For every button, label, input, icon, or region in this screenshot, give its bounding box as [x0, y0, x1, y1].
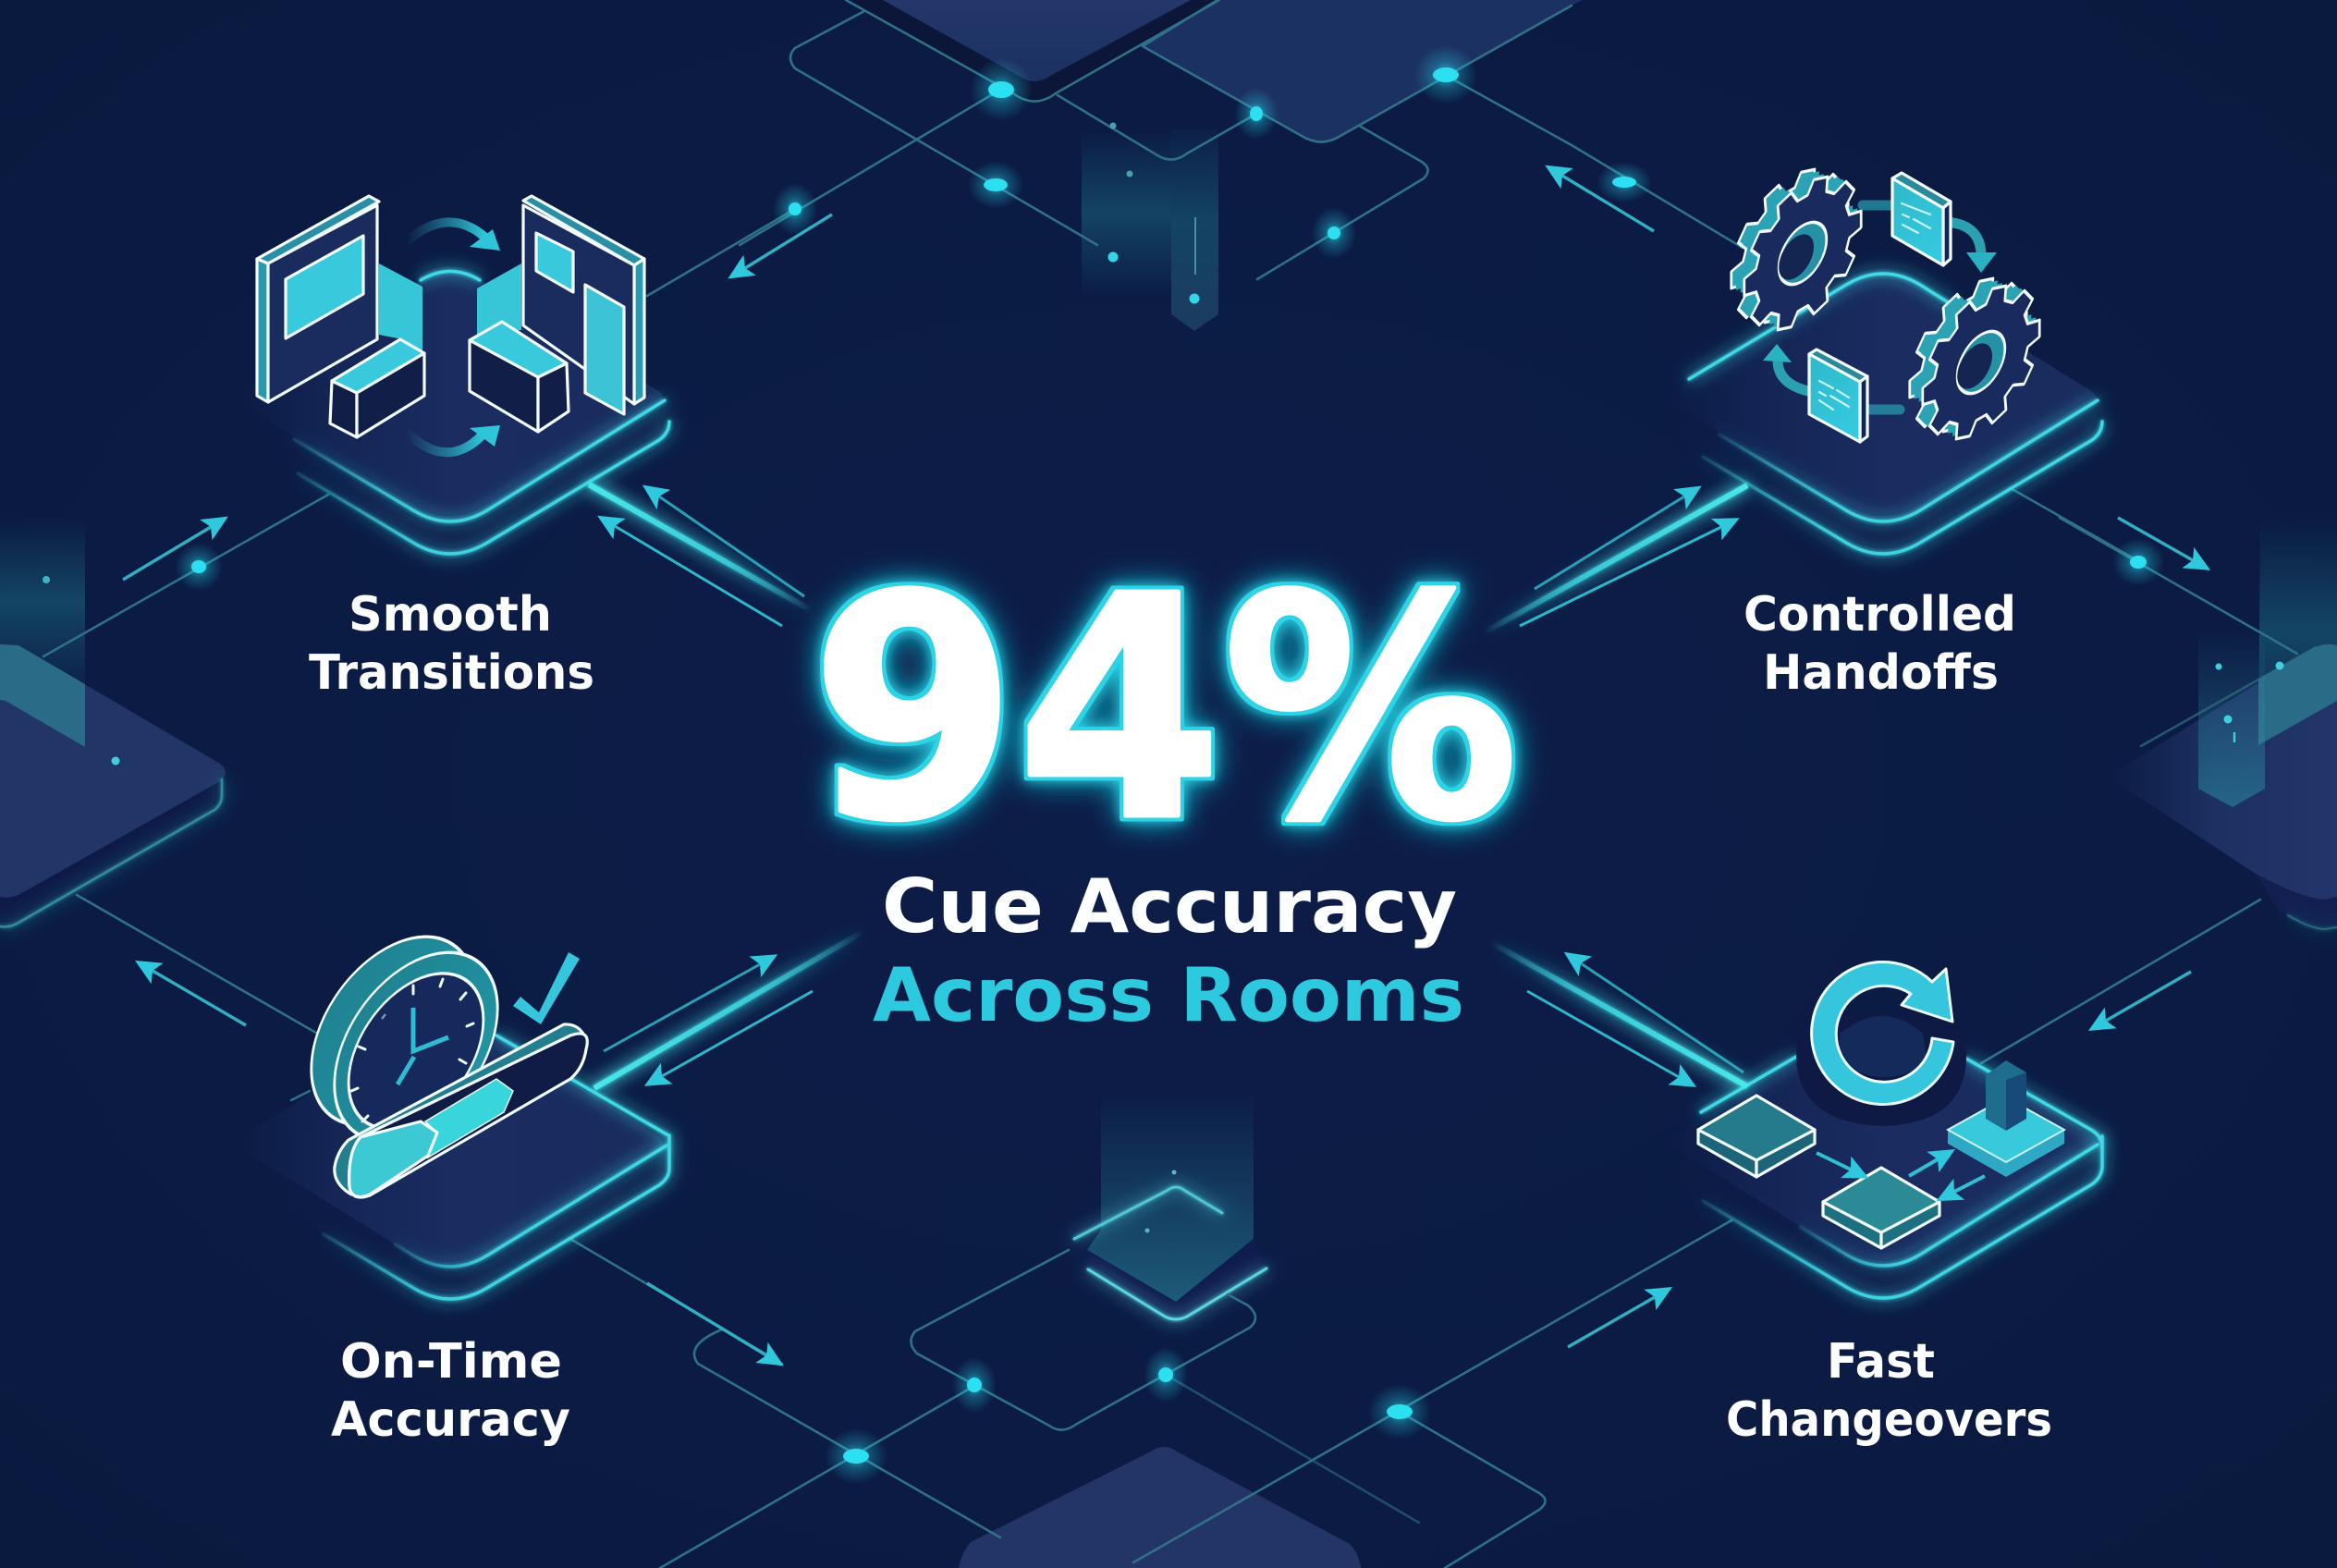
icon: screens and transition arrows: [257, 196, 644, 452]
check mark: [513, 952, 580, 1024]
platform: smooth transitions base: [238, 272, 669, 554]
label: smooth transitions: [309, 587, 594, 701]
outer direction arrows: [123, 176, 2193, 1355]
label: on-time accuracy: [331, 1334, 570, 1448]
block two: [1823, 1168, 1939, 1248]
metric subtitle: [873, 864, 1464, 1038]
connector beams and arrows to the central metric: [589, 484, 1747, 1088]
document one: [1892, 173, 1951, 265]
right box: [470, 322, 569, 432]
label: fast changeovers: Fast: [1827, 1334, 1935, 1390]
label: on-time accuracy: On-Time: [340, 1334, 562, 1390]
left screen: [257, 196, 422, 402]
block three with knob: [1948, 1060, 2064, 1177]
gear one: [1731, 145, 1861, 354]
label: controlled handoffs: Controlled: [1744, 587, 2016, 643]
label: smooth transitions: Transitions: [309, 645, 594, 701]
label: on-time accuracy: Accuracy: [331, 1392, 570, 1448]
left box: [330, 339, 424, 437]
gear two: [1910, 254, 2039, 463]
platform: fast changeovers base: [1670, 1018, 2102, 1298]
document two: [1809, 349, 1867, 442]
label: smooth transitions: Smooth: [349, 587, 552, 643]
shadow behind refresh: [1796, 1012, 1966, 1126]
right screen: [477, 196, 644, 414]
metric subtitle: Across Rooms: [873, 952, 1464, 1038]
icon: gears and documents handoff loop: [1731, 145, 2039, 463]
label: controlled handoffs: [1744, 587, 2016, 701]
teal rims of background plates: [0, 779, 2337, 1319]
label: fast changeovers: [1726, 1334, 2052, 1448]
label: controlled handoffs: Handoffs: [1763, 645, 1999, 701]
handoff arrows: [1763, 205, 1997, 410]
metric subtitle: Cue Accuracy: [882, 864, 1457, 949]
platform: on-time accuracy base: [238, 1019, 669, 1299]
transition arrows: [406, 222, 500, 452]
label: fast changeovers: Changeovers: [1726, 1392, 2052, 1448]
block one: [1698, 1096, 1815, 1177]
icon: refresh and changeover blocks: [1698, 962, 2064, 1248]
clock: [312, 907, 497, 1170]
platform: controlled handoffs base: [1670, 274, 2102, 554]
central metric: 94%: [811, 532, 1519, 888]
flow arrows: [1817, 1153, 1985, 1192]
icon: clock with progress bar and check mark: [312, 907, 587, 1197]
refresh arrow: [1812, 962, 1953, 1104]
progress bar: [335, 1024, 587, 1197]
